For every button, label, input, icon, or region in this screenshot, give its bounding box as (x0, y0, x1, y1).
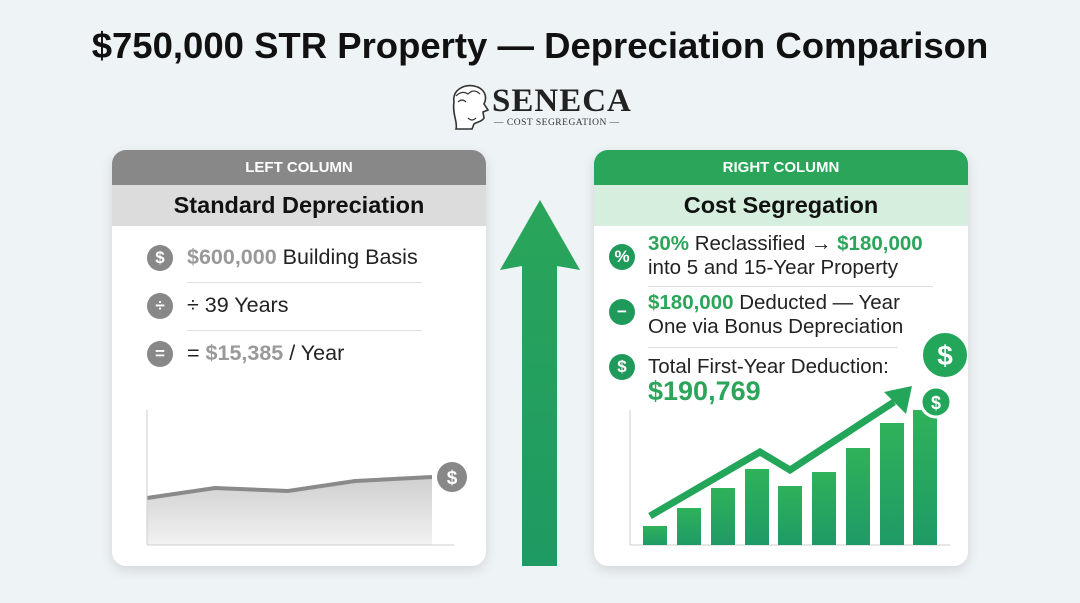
panel: left standard depreciation (112, 150, 486, 566)
icon: equals (147, 341, 173, 367)
text: building basis: $600,000 Building Basis (187, 245, 418, 269)
icon: big dollar coin: $ (931, 393, 941, 413)
icon: divide (147, 293, 173, 319)
text: deducted: $180,000 Deducted — Year (648, 291, 900, 314)
text: total deduction: $190,769 (648, 376, 761, 406)
panel: left standard depreciation: Standard Depreciation (174, 192, 424, 218)
icon: divide: ÷ (155, 296, 165, 315)
icon: minus (609, 299, 635, 325)
icon: dollar (147, 245, 173, 271)
arrow: big green up (500, 200, 580, 566)
title: $750,000 STR Property — Depreciation Comparison (92, 25, 988, 66)
text: deducted: One via Bonus Depreciation (648, 315, 903, 338)
panel: right cost segregation: Cost Segregation (684, 192, 878, 218)
icon: minus: − (617, 302, 627, 321)
logo: — COST SEGREGATION — (494, 118, 620, 128)
text: total deduction: Total First-Year Deduction: (648, 355, 889, 378)
icon: head (452, 84, 490, 130)
text: reclassified (648, 232, 923, 279)
logo (452, 83, 632, 130)
panel: right cost segregation: RIGHT COLUMN (723, 159, 839, 176)
text: per year: = $15,385 / Year (187, 341, 344, 365)
chart: flat area (146, 410, 467, 546)
icon: percent (609, 244, 635, 270)
icon: percent: % (614, 247, 630, 266)
icon: big dollar coin (922, 333, 967, 418)
icon: equals: = (155, 344, 165, 363)
text: reclassified: 30% Reclassified → $180,000 (648, 232, 923, 255)
text: deducted (648, 291, 903, 338)
chart: flat area: $ (447, 468, 458, 489)
text: reclassified: into 5 and 15-Year Property (648, 256, 898, 279)
icon: dollar: $ (617, 357, 627, 376)
text: 39 years: ÷ 39 Years (187, 293, 288, 317)
icon: dollar (609, 354, 635, 380)
icon: big dollar coin: $ (937, 340, 953, 371)
chart: rising bars (630, 386, 950, 546)
panel: left standard depreciation: LEFT COLUMN (245, 159, 353, 176)
logo: SENECA (492, 83, 632, 119)
text: total deduction (648, 355, 889, 406)
icon: dollar: $ (155, 248, 165, 267)
panel: right cost segregation (594, 150, 968, 566)
